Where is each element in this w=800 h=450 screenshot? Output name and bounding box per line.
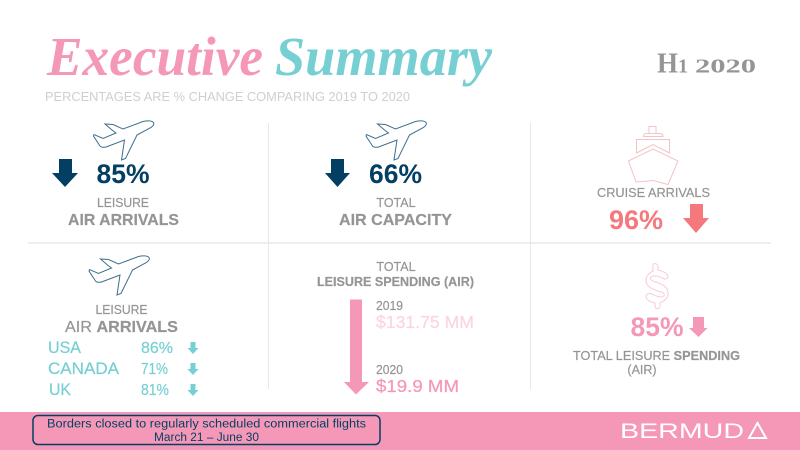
title: Summary <box>275 26 493 87</box>
label: LEISURE <box>97 196 149 210</box>
label: TOTAL LEISURE SPENDING <box>573 349 740 363</box>
icon: airplane <box>94 121 154 160</box>
icon: ship <box>628 126 678 184</box>
icon: down arrow <box>683 204 709 233</box>
period label: 1 <box>678 56 688 78</box>
period label: 2020 <box>695 56 756 78</box>
row: Canada: 71% <box>141 361 168 378</box>
row: Canada <box>48 360 198 378</box>
label bold: AIR ARRIVALS <box>65 319 178 336</box>
panel: total leisure spending change <box>573 264 740 377</box>
value 2020: $19.9 MM <box>376 376 459 396</box>
icon: dollar sign <box>646 264 668 309</box>
label bold: AIR CAPACITY <box>339 212 453 229</box>
percentage: 85% <box>630 312 684 342</box>
icon: long down arrow <box>344 300 369 394</box>
percentage: 85% <box>96 159 150 189</box>
panel: leisure air arrivals <box>52 121 179 229</box>
panel: cruise arrivals <box>597 126 710 235</box>
row: UK <box>49 381 198 399</box>
label bold: LEISURE SPENDING (AIR) <box>317 275 474 289</box>
icon: down arrow <box>689 317 708 337</box>
callout <box>33 416 380 444</box>
logo: Bermuda: BERMUD <box>620 420 744 443</box>
callout: Borders closed to regularly scheduled commercial flights <box>47 418 366 430</box>
row: UK: UK <box>49 381 71 399</box>
row: USA: 86% <box>141 340 173 357</box>
label: LEISURE <box>96 303 148 317</box>
label: CRUISE ARRIVALS <box>597 186 710 200</box>
period label <box>657 48 756 80</box>
panel: total air capacity <box>325 121 453 229</box>
period label: H <box>657 48 678 80</box>
row: USA: USA <box>48 339 81 357</box>
row: Canada: CANADA <box>48 360 119 378</box>
icon: airplane <box>366 121 426 160</box>
icon: down arrow <box>52 159 78 187</box>
icon: airplane <box>89 256 149 295</box>
subtitle: PERCENTAGES ARE % CHANGE COMPARING 2019 TO 2020 <box>45 90 410 104</box>
row: USA <box>48 339 198 357</box>
panel: leisure air arrivals by market <box>48 256 198 399</box>
label: TOTAL <box>376 260 416 274</box>
title: Executive <box>46 26 263 87</box>
year 2019: 2019 <box>376 299 403 313</box>
label air: (AIR) <box>627 363 657 377</box>
logo: Bermuda <box>620 420 766 443</box>
title <box>46 26 493 87</box>
footer band <box>0 412 800 450</box>
row: UK: 81% <box>141 382 169 399</box>
value 2019: $131.75 MM <box>376 312 474 332</box>
percentage: 66% <box>369 159 422 189</box>
grid dividers <box>28 123 771 389</box>
label: TOTAL <box>376 196 416 210</box>
percentage: 96% <box>609 205 663 235</box>
panel: total leisure spending <box>317 260 474 396</box>
year 2020: 2020 <box>376 363 403 377</box>
icon: down arrow <box>325 159 350 187</box>
label bold: AIR ARRIVALS <box>68 212 179 229</box>
callout: March 21 – June 30 <box>154 432 259 444</box>
